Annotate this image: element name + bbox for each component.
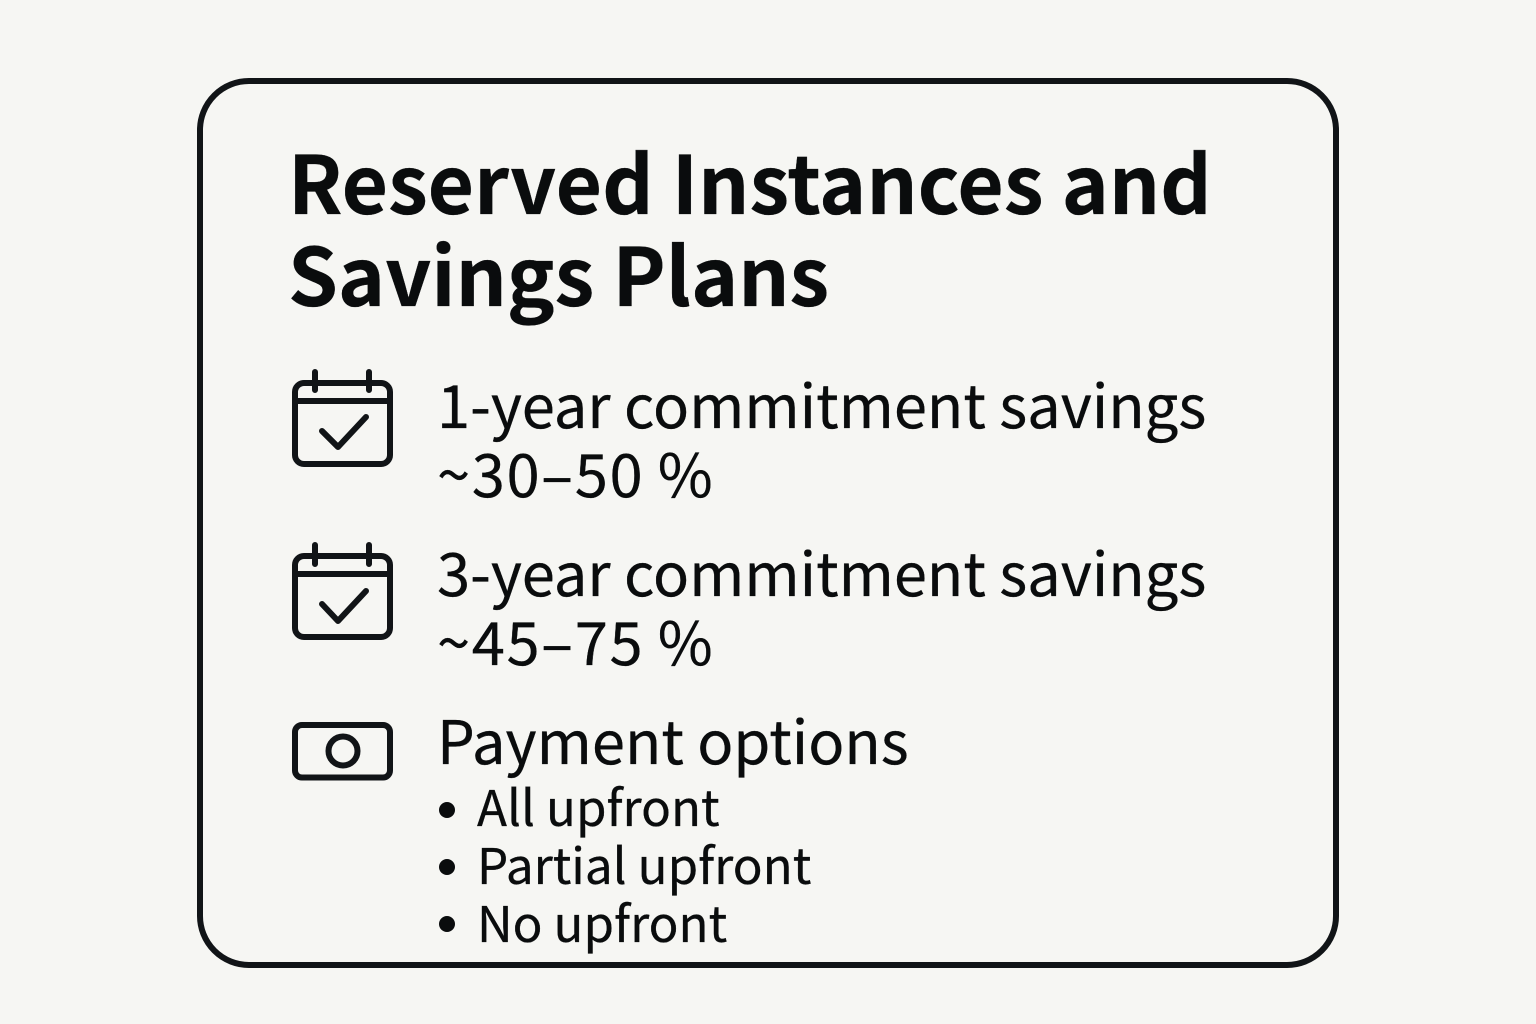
list: payment options bbox=[439, 770, 811, 957]
icon: calendar one year bbox=[292, 369, 393, 467]
title bbox=[288, 122, 1212, 330]
bullet: no upfront: No upfront bbox=[477, 886, 727, 957]
bullet: partial upfront: Partial upfront bbox=[477, 828, 811, 899]
title: Reserved Instances and bbox=[288, 122, 1212, 238]
text: one year savings: 1-year commitment savings bbox=[437, 360, 1206, 446]
icon: calendar three year bbox=[292, 542, 393, 640]
heading: payment options: Payment options bbox=[437, 696, 909, 782]
title: Savings Plans bbox=[288, 214, 829, 330]
icon: banknote bbox=[292, 722, 393, 780]
panel: reserved instances card bbox=[197, 78, 1339, 968]
text: three year savings: 3-year commitment savings bbox=[437, 528, 1206, 614]
text: three year savings: ~45–75 % bbox=[437, 597, 714, 683]
bullet: all upfront: All upfront bbox=[477, 770, 720, 841]
text: one year savings: ~30–50 % bbox=[437, 429, 714, 515]
text: three year savings bbox=[437, 528, 1206, 683]
text: one year savings bbox=[437, 360, 1206, 515]
